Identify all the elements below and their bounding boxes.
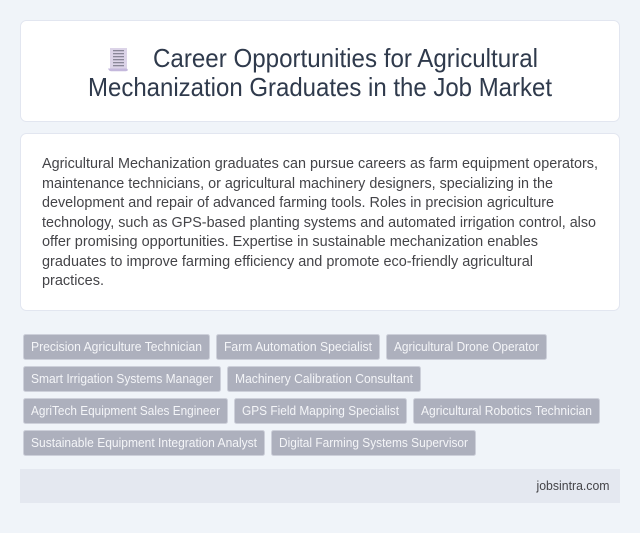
tag: Precision Agriculture Technician [24,334,210,360]
text block: summary [42,155,598,289]
icon: document scroll [108,48,128,71]
tag: Digital Farming Systems Supervisor [272,430,476,456]
title: Career Opportunities for Agricultural [153,43,538,73]
text block: summary: technology, such as GPS-based planting systems and automated irrigation control, also [42,214,596,231]
text block: summary: Agricultural Mechanization graduates can pursue careers as farm equipment operators, [42,155,598,172]
panel: summary text [20,134,620,310]
tag: Smart Irrigation Systems Manager [24,366,220,392]
tag: Agricultural Robotics Technician [414,398,600,424]
tag: Digital Farming Systems Supervisor: Digital Farming Systems Supervisor [279,435,469,450]
tag: Machinery Calibration Consultant [228,366,420,392]
tag: GPS Field Mapping Specialist: GPS Field Mapping Specialist [242,403,399,418]
text block: summary: maintenance technicians, or agricultural machinery designers, specializing in the [42,175,553,192]
title: Mechanization Graduates in the Job Market [88,72,553,102]
tag: Smart Irrigation Systems Manager: Smart Irrigation Systems Manager [31,371,214,386]
footer: jobsintra.com [536,478,610,493]
text block: summary: practices. [42,272,104,289]
tag: AgriTech Equipment Sales Engineer: AgriTech Equipment Sales Engineer [31,403,221,418]
tags: career roles [24,334,600,456]
text block: summary: offer promising opportunities. Expertise in sustainable mechanization enables [42,233,538,250]
panel: header [20,20,620,122]
text block: summary: development and repair of advanced farming tools. Roles in precision agriculture [42,194,554,211]
tag: AgriTech Equipment Sales Engineer [24,398,228,424]
tag: Machinery Calibration Consultant: Machinery Calibration Consultant [235,371,413,386]
tag: GPS Field Mapping Specialist [234,398,406,424]
tag: Farm Automation Specialist [216,334,380,360]
footer [20,469,620,503]
tag: Precision Agriculture Technician: Precision Agriculture Technician [31,339,202,354]
text block: summary: graduates to improve farming efficiency and promote eco-friendly agricultural [42,253,533,270]
title [88,43,553,102]
tag: Farm Automation Specialist: Farm Automation Specialist [224,339,372,354]
tag: Agricultural Robotics Technician: Agricultural Robotics Technician [421,403,592,418]
tag: Agricultural Drone Operator: Agricultural Drone Operator [394,339,540,354]
tag: Sustainable Equipment Integration Analyst: Sustainable Equipment Integration Analyst [31,435,257,450]
tag: Sustainable Equipment Integration Analyst [24,430,264,456]
tag: Agricultural Drone Operator [386,334,546,360]
